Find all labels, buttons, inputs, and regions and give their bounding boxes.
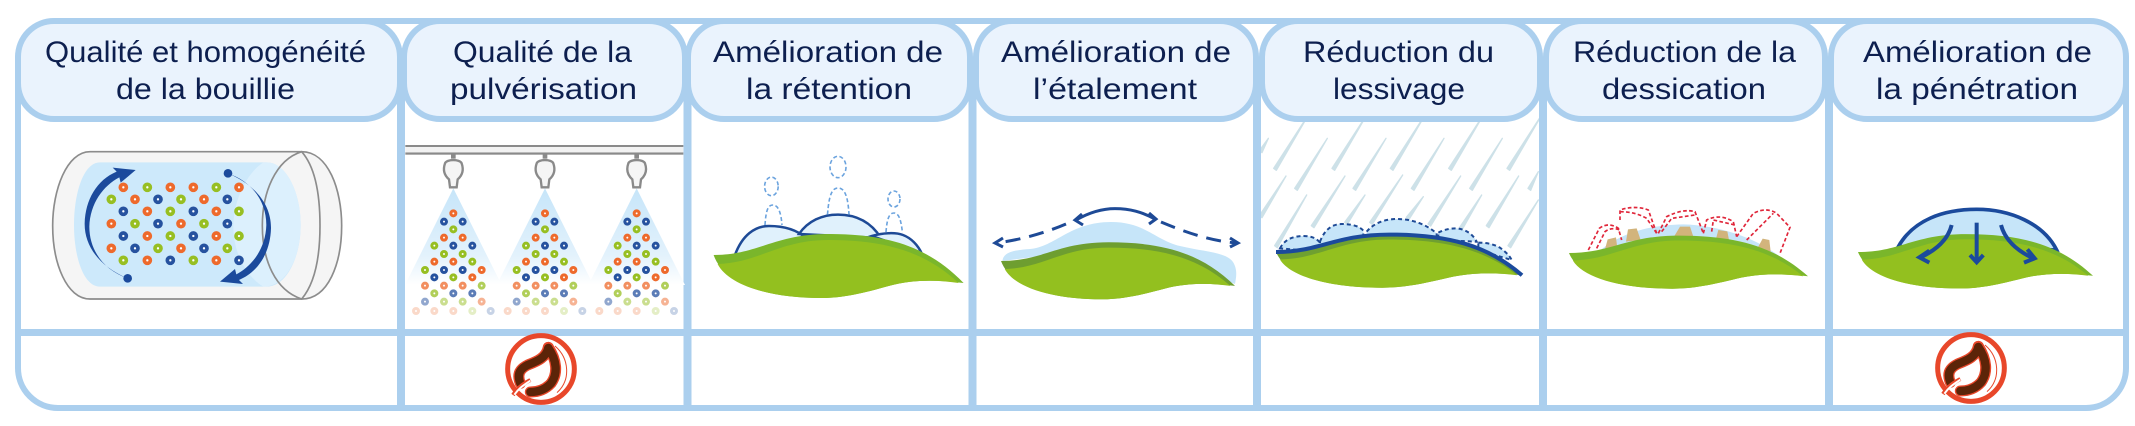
heading: qualité et homogénéité: de la bouillie: [116, 73, 295, 106]
heading: réduction de la dessication: [1546, 21, 1825, 119]
illustration: spray boom with nozzles: [405, 145, 685, 313]
illustration: desiccation on leaf: [1569, 207, 1808, 289]
heading: amélioration de l'étalement: l’étalement: [1033, 73, 1197, 106]
heading: réduction de la dessication: dessication: [1602, 73, 1766, 106]
heading: amélioration de la pénétration: [1831, 21, 2126, 119]
heading: réduction du lessivage: Réduction du: [1303, 36, 1494, 69]
heading: réduction du lessivage: [1262, 21, 1540, 119]
icon: flame leaf, pénétration: [1938, 335, 2004, 401]
heading: amélioration de l'étalement: Amélioration de: [1001, 36, 1231, 69]
heading: amélioration de la pénétration: la pénétration: [1876, 73, 2078, 106]
heading: réduction de la dessication: Réduction de la: [1573, 36, 1797, 69]
illustration: spreading on leaf: [995, 209, 1238, 299]
heading: amélioration de la rétention: [688, 21, 970, 119]
illustration: retention droplets on leaf: [714, 156, 964, 298]
heading: amélioration de la rétention: la rétention: [746, 73, 912, 106]
heading: qualité de la pulvérisation: Qualité de la: [453, 36, 633, 69]
heading: amélioration de la rétention: Amélioration de: [713, 36, 943, 69]
heading: amélioration de la pénétration: Amélioration de: [1863, 36, 2092, 69]
heading: amélioration de l'étalement: [976, 21, 1256, 119]
icon: flame leaf, pulvérisation: [508, 336, 574, 402]
heading: qualité de la pulvérisation: pulvérisation: [450, 73, 637, 106]
heading: qualité et homogénéité: [18, 21, 400, 119]
illustration: penetration into leaf: [1858, 209, 2093, 289]
heading: qualité de la pulvérisation: [404, 21, 685, 119]
illustration: rotating tank with slurry: [53, 152, 342, 299]
illustration: rain on leaf: [1259, 113, 1543, 288]
heading: qualité et homogénéité: Qualité et homogénéité: [45, 36, 366, 69]
heading: réduction du lessivage: lessivage: [1333, 73, 1465, 106]
